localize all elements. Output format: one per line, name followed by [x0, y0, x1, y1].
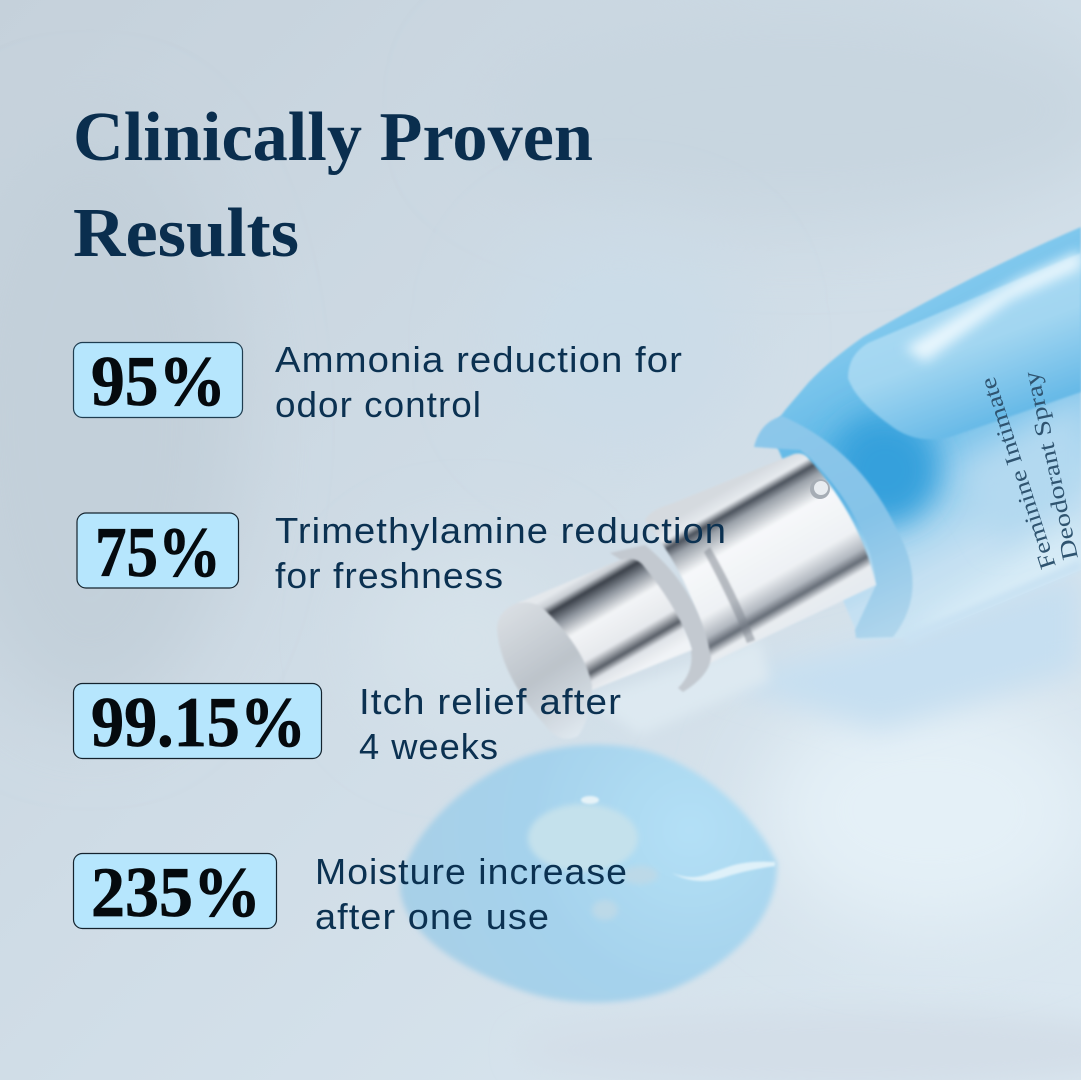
description: Ammonia reduction for [275, 339, 683, 380]
blue neck collar [754, 416, 913, 638]
bottle shoulder panel [848, 253, 1081, 439]
badge 235%: 235% [91, 854, 261, 932]
badge 99.15%: 99.15% [91, 684, 306, 762]
description [359, 681, 622, 767]
description: after one use [315, 896, 550, 937]
spray bottle [497, 227, 1081, 739]
description: Moisture increase [315, 851, 628, 892]
bottle body [770, 227, 1081, 650]
description: 4 weeks [359, 726, 499, 767]
stat: 99.15% itch relief [74, 681, 622, 767]
cap end face [497, 602, 592, 739]
nozzle hole [810, 479, 830, 499]
description: Itch relief after [359, 681, 622, 722]
title [73, 99, 593, 272]
puddle of serum [400, 745, 777, 1002]
description: Trimethylamine reduction [275, 510, 727, 551]
title: Results [73, 195, 299, 272]
stat: 235% moisture increase [74, 851, 628, 937]
stat: 95% ammonia reduction [74, 339, 683, 425]
panel highlight [905, 250, 1081, 362]
description [275, 510, 727, 596]
label text on bottle: Feminine Intimate [975, 374, 1061, 572]
silver ring between sections [610, 545, 711, 692]
description: for freshness [275, 555, 504, 596]
description [315, 851, 628, 937]
silver pump upper section [645, 454, 876, 664]
label text on bottle [975, 369, 1081, 572]
description [275, 339, 683, 425]
stat: 75% trimethylamine reduction [77, 510, 727, 596]
description: odor control [275, 384, 482, 425]
silver front cap [518, 559, 692, 690]
title: Clinically Proven [73, 99, 593, 176]
badge 75%: 75% [95, 514, 221, 592]
badge 95%: 95% [91, 343, 226, 421]
